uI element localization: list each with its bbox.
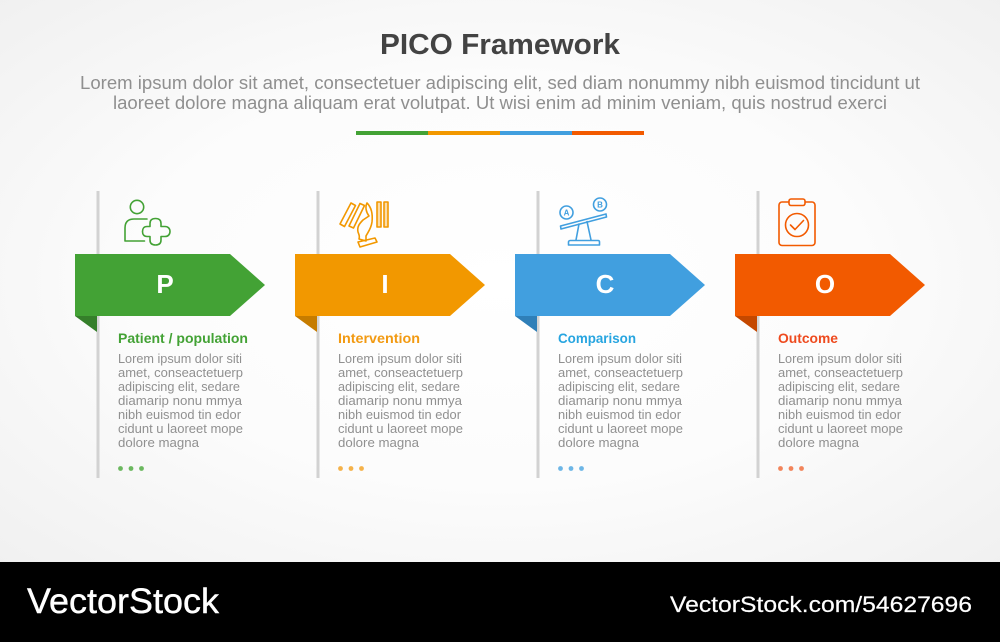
ribbon fold [295, 316, 317, 332]
arrow banner I [295, 254, 485, 316]
body text: nibh euismod tin edor [118, 408, 241, 422]
body text: adipiscing elit, sedare [118, 380, 240, 394]
letter C: C [596, 269, 615, 299]
body text: nibh euismod tin edor [558, 408, 681, 422]
body text: Lorem ipsum dolor siti [558, 352, 682, 366]
body text: diamarip nonu mmya [558, 394, 682, 408]
subtitle text: laoreet dolore magna aliquam erat volutpat. Ut wisi enim ad minim veniam, quis nostrud exerci [113, 93, 887, 113]
icon: hand with dominoes [340, 202, 388, 247]
body text: amet, conseactetuerp [118, 366, 243, 380]
body text: cidunt u laoreet mope [338, 422, 463, 436]
colour divider bar [356, 131, 644, 135]
body text: cidunt u laoreet mope [778, 422, 903, 436]
arrow banner C [515, 254, 705, 316]
ribbon fold [515, 316, 537, 332]
body text: adipiscing elit, sedare [558, 380, 680, 394]
heading: Comparison [558, 330, 636, 346]
body text: adipiscing elit, sedare [778, 380, 900, 394]
heading: Intervention [338, 330, 420, 346]
body text [778, 352, 903, 450]
body text: diamarip nonu mmya [778, 394, 902, 408]
subtitle text: Lorem ipsum dolor sit amet, consectetuer adipiscing elit, sed diam nonummy nibh euismod tincidunt ut [80, 73, 920, 93]
body text: diamarip nonu mmya [338, 394, 462, 408]
body text: dolore magna [558, 436, 639, 450]
body text: amet, conseactetuerp [338, 366, 463, 380]
body text: nibh euismod tin edor [338, 408, 461, 422]
body text: Lorem ipsum dolor siti [338, 352, 462, 366]
footer watermark bar [0, 562, 1000, 642]
body text [118, 352, 243, 450]
heading: Patient / population [118, 330, 248, 346]
arrow banner O [735, 254, 925, 316]
heading: Outcome [778, 330, 838, 346]
body text [338, 352, 463, 450]
body text: Lorem ipsum dolor siti [118, 352, 242, 366]
icon: seesaw scale A B [560, 198, 606, 245]
icon: clipboard with check [779, 199, 815, 246]
icon: person with plus [125, 200, 170, 245]
ribbon fold [735, 316, 757, 332]
title: PICO Framework [380, 29, 621, 61]
letter O: O [815, 269, 835, 299]
icon: seesaw scale A B: A [564, 208, 570, 218]
body text: dolore magna [778, 436, 859, 450]
body text: amet, conseactetuerp [778, 366, 903, 380]
body text: Lorem ipsum dolor siti [778, 352, 902, 366]
subtitle text [80, 73, 920, 113]
panel: Comparison [515, 191, 705, 478]
body text: cidunt u laoreet mope [118, 422, 243, 436]
panel: Patient / population [75, 191, 265, 478]
footer url text: VectorStock.com/54627696 [670, 592, 972, 617]
letter I: I [381, 269, 389, 299]
body text: amet, conseactetuerp [558, 366, 683, 380]
body text: adipiscing elit, sedare [338, 380, 460, 394]
dots [778, 466, 804, 471]
body text: dolore magna [118, 436, 199, 450]
body text: dolore magna [338, 436, 419, 450]
body text [558, 352, 683, 450]
icon: seesaw scale A B: B [597, 200, 603, 210]
dots [338, 466, 364, 471]
panel: Outcome [735, 191, 925, 478]
panel: Intervention [295, 191, 485, 478]
dots [558, 466, 584, 471]
arrow banner P [75, 254, 265, 316]
body text: nibh euismod tin edor [778, 408, 901, 422]
letter P: P [156, 269, 174, 299]
dots [118, 466, 144, 471]
footer logo text: VectorStock [27, 582, 220, 621]
body text: cidunt u laoreet mope [558, 422, 683, 436]
ribbon fold [75, 316, 97, 332]
body text: diamarip nonu mmya [118, 394, 242, 408]
